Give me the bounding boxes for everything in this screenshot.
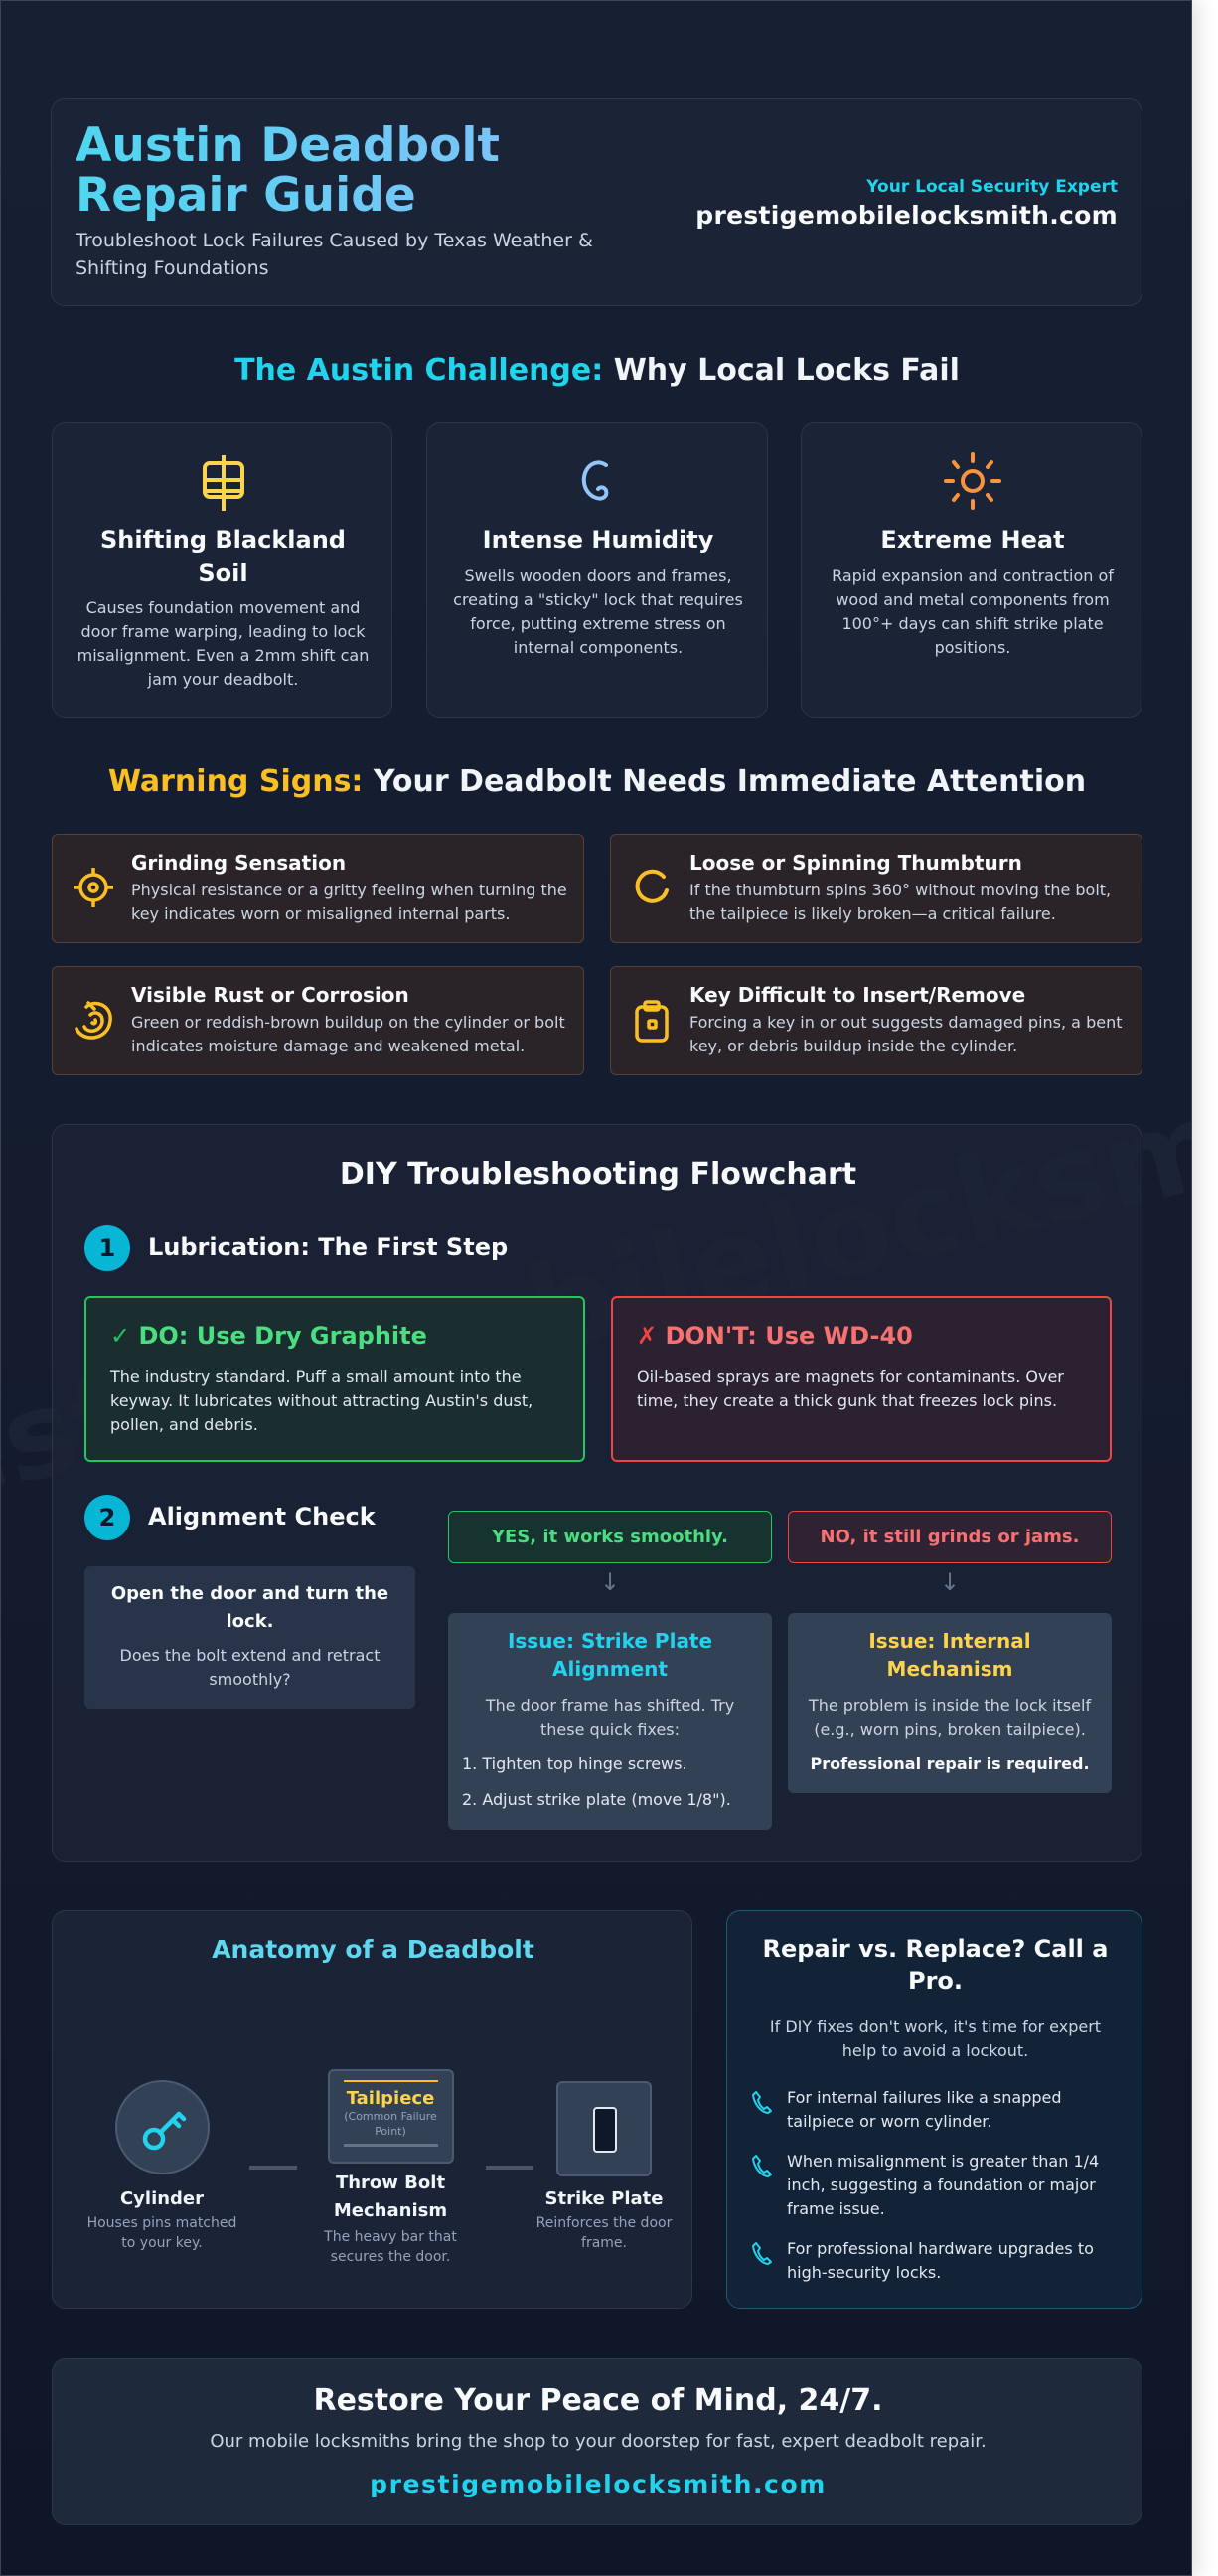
- issue strike plate: The door frame has shifted. Try these quick fixes:: [486, 1696, 734, 1739]
- website: prestigemobilelocksmith.com: [695, 201, 1118, 230]
- question box: [84, 1566, 415, 1709]
- warning: rust: Visible Rust or Corrosion: [131, 983, 409, 1007]
- issue strike plate: 2. Adjust strike plate (move 1/8").: [462, 1790, 731, 1809]
- title: [76, 121, 500, 221]
- issue strike plate: Issue: Strike Plate Alignment: [508, 1629, 712, 1681]
- title: Repair Guide: [76, 168, 416, 223]
- text: Swells wooden doors and frames, creating a "sticky" lock that requires force, putting extreme stress on internal components.: [453, 566, 743, 657]
- subtitle: Troubleshoot Lock Failures Caused by Texas Weather & Shifting Foundations: [76, 230, 593, 279]
- yes pill: [448, 1511, 772, 1563]
- bullet list: For internal failures like a snapped tailpiece or worn cylinder.: [787, 2088, 1062, 2131]
- throw bolt: [324, 2069, 457, 2265]
- cylinder: Houses pins matched to your key.: [87, 2215, 236, 2251]
- cta text: Our mobile locksmiths bring the shop to your doorstep for fast, expert deadbolt repair.: [210, 2431, 987, 2452]
- bullet list: [752, 2088, 1099, 2282]
- throw bolt: (Common Failure: [344, 2110, 437, 2123]
- icon: rust: [75, 1001, 112, 1040]
- dont box: [611, 1296, 1112, 1462]
- strike plate: Reinforces the door frame.: [536, 2215, 672, 2251]
- throw bolt: Point): [375, 2125, 406, 2138]
- issue strike plate: 1. Tighten top hinge screws.: [462, 1754, 687, 1773]
- cylinder: Cylinder: [120, 2188, 204, 2209]
- step 2: 2: [99, 1504, 115, 1531]
- connector: [486, 2166, 533, 2170]
- warning: grinding: Grinding Sensation: [131, 851, 346, 875]
- header card: [51, 98, 1142, 306]
- icon: swirl: [582, 460, 608, 501]
- panel: flowchart: Lubrication: The First Step: [148, 1233, 508, 1261]
- issue strike plate: [448, 1613, 772, 1830]
- icon: clipboard: [635, 1000, 669, 1043]
- step 1: 1: [99, 1234, 115, 1262]
- throw bolt: The heavy bar that secures the door.: [324, 2229, 457, 2265]
- anatomy title: Anatomy of a Deadbolt: [212, 1935, 534, 1964]
- dont box: ✗ DON'T: Use WD-40: [637, 1322, 913, 1350]
- icon: grid: [203, 455, 244, 511]
- throw bolt: Mechanism: [334, 2200, 447, 2221]
- panel: soil: [52, 422, 392, 718]
- cta url: prestigemobilelocksmith.com: [370, 2470, 827, 2498]
- warning: key: Forcing a key in or out suggests damaged pins, a bent key, or debris buildup inside the cylinder.: [689, 1013, 1122, 1055]
- icon: sun: [944, 452, 1001, 510]
- step 2: [84, 1495, 130, 1540]
- question box: Open the door and turn the lock.: [111, 1583, 388, 1632]
- issue internal: The problem is inside the lock itself (e.g., worn pins, broken tailpiece).: [809, 1696, 1091, 1739]
- text: Causes foundation movement and door frame warping, leading to lock misalignment. Even a 2mm shift can jam your deadbolt.: [77, 598, 369, 689]
- strike plate: Strike Plate: [545, 2188, 663, 2209]
- connector: [249, 2166, 297, 2170]
- arrow no: ↓: [940, 1568, 960, 1596]
- warning: key: [610, 966, 1142, 1075]
- dont box: Oil-based sprays are magnets for contaminants. Over time, they create a thick gunk that freezes lock pins.: [637, 1368, 1064, 1410]
- title: Repair vs. Replace? Call a Pro.: [763, 1935, 1108, 1995]
- panel: heat: [801, 422, 1142, 718]
- icon: target: [74, 868, 113, 907]
- heading: Austin challenge: The Austin Challenge: Why Local Locks Fail: [234, 353, 960, 388]
- bullet list: For professional hardware upgrades to high-security locks.: [787, 2239, 1094, 2282]
- heading: warning signs: Warning Signs: Your Deadbolt Needs Immediate Attention: [108, 764, 1086, 799]
- warning: thumbturn: Loose or Spinning Thumbturn: [689, 851, 1022, 875]
- cta title: Restore Your Peace of Mind, 24/7.: [313, 2383, 883, 2418]
- do box: The industry standard. Puff a small amount into the keyway. It lubricates without attracting Austin's dust, pollen, and debris.: [110, 1368, 533, 1434]
- panel: anatomy: [52, 1910, 692, 2309]
- warning: rust: Green or reddish-brown buildup on the cylinder or bolt indicates moisture damage and weakened metal.: [131, 1013, 565, 1055]
- throw bolt: Tailpiece: [347, 2088, 434, 2109]
- issue internal: Professional repair is required.: [810, 1754, 1090, 1773]
- panel: CTA: [52, 2358, 1142, 2525]
- warning: grinding: Physical resistance or a gritty feeling when turning the key indicates worn or misaligned internal parts.: [131, 881, 567, 923]
- title: Austin Deadbolt: [76, 118, 500, 173]
- warning: thumbturn: If the thumbturn spins 360° without moving the bolt, the tailpiece is likely broken—a critical failure.: [689, 881, 1111, 923]
- step 1: [84, 1225, 130, 1271]
- warning: grinding: [52, 834, 584, 943]
- issue internal: Issue: Internal Mechanism: [868, 1629, 1031, 1681]
- strike plate: [536, 2081, 672, 2251]
- issue internal: [788, 1613, 1112, 1793]
- arrow yes: ↓: [600, 1568, 620, 1596]
- flowchart title: DIY Troubleshooting Flowchart: [340, 1157, 856, 1192]
- intro: If DIY fixes don't work, it's time for expert help to avoid a lockout.: [770, 2017, 1101, 2060]
- panel: flowchart: Alignment Check: [148, 1503, 376, 1530]
- warning: key: Key Difficult to Insert/Remove: [689, 983, 1025, 1007]
- cylinder: [87, 2080, 236, 2251]
- throw bolt: Throw Bolt: [336, 2173, 445, 2193]
- title: Intense Humidity: [483, 526, 713, 554]
- panel: humidity: [426, 422, 768, 718]
- panel: repair vs replace: [726, 1910, 1142, 2309]
- text: Rapid expansion and contraction of wood and metal components from 100°+ days can shift strike plate positions.: [832, 566, 1114, 657]
- title: Shifting Blackland Soil: [100, 526, 346, 587]
- yes pill: YES, it works smoothly.: [492, 1527, 728, 1547]
- icon: spin: [636, 869, 669, 903]
- do box: ✓ DO: Use Dry Graphite: [110, 1322, 427, 1350]
- bullet list: When misalignment is greater than 1/4 inch, suggesting a foundation or major frame issue.: [787, 2152, 1099, 2218]
- no pill: [788, 1511, 1112, 1563]
- warning: thumbturn: [610, 834, 1142, 943]
- tagline: Your Local Security Expert: [866, 177, 1118, 197]
- question box: Does the bolt extend and retract smoothly?: [119, 1646, 380, 1689]
- do box: [84, 1296, 585, 1462]
- panel: flowchart: [52, 1124, 1142, 1862]
- warning: rust: [52, 966, 584, 1075]
- no pill: NO, it still grinds or jams.: [821, 1527, 1079, 1547]
- title: Extreme Heat: [880, 526, 1065, 554]
